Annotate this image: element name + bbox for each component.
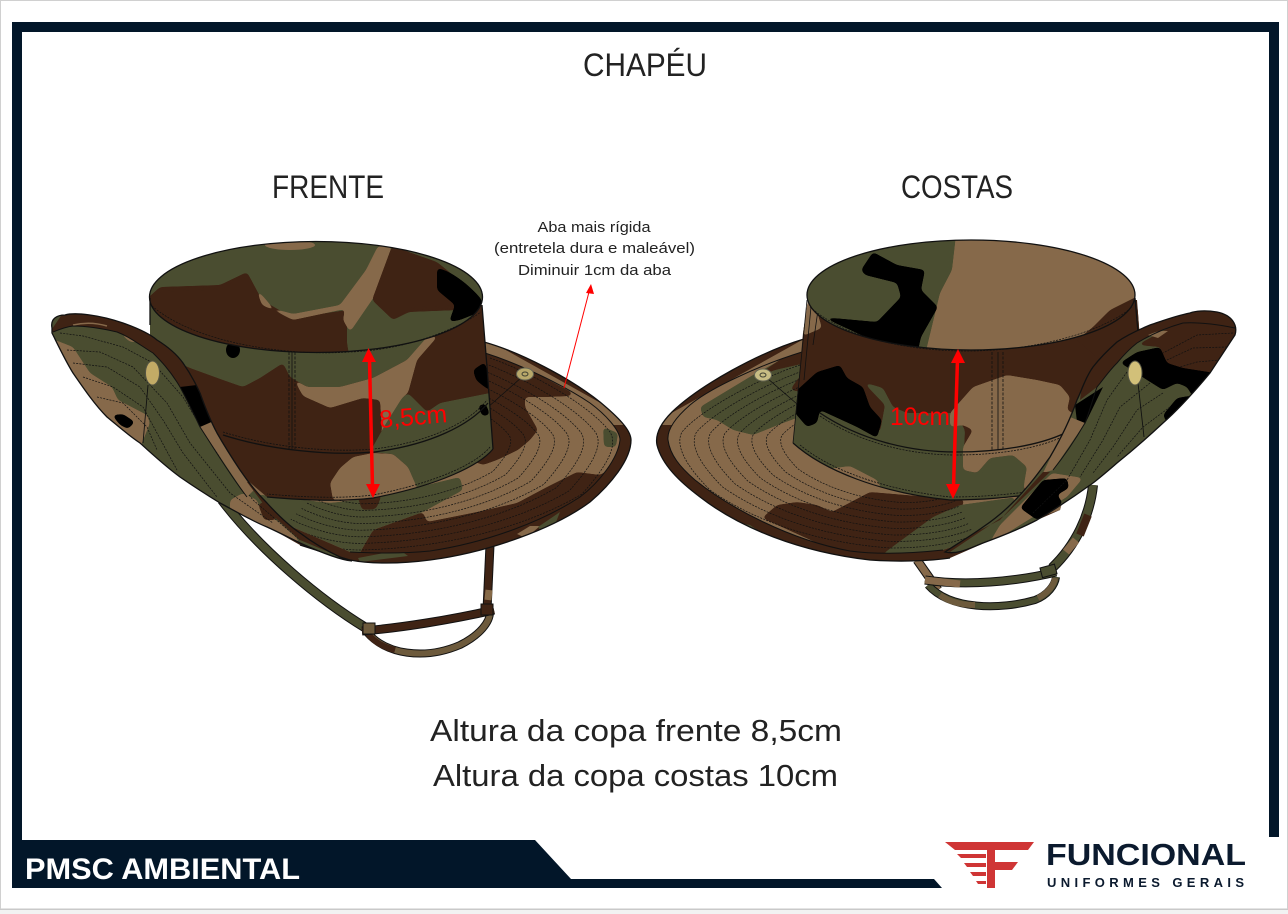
annotation arrow pointing to the brim note	[564, 284, 594, 388]
footer label: PMSC AMBIENTAL	[25, 853, 300, 886]
heading: back: COSTAS	[901, 169, 1013, 205]
logo tagline: UNIFORMES GERAIS	[1047, 875, 1244, 890]
snap button: back view	[1128, 361, 1142, 385]
hat: back view	[650, 235, 1240, 606]
heading: front: FRENTE	[272, 169, 384, 205]
crown stitching: back view	[793, 300, 1065, 500]
measurement arrow: front 8,5cm	[362, 348, 448, 498]
brim annotation text	[494, 219, 695, 279]
crown top: front view	[140, 240, 482, 360]
crown wall: back view	[788, 298, 1145, 505]
eyelet: front view	[487, 368, 534, 408]
crown wall: front view	[150, 305, 494, 501]
side flap: back view	[940, 305, 1240, 553]
snap button: front view	[146, 361, 160, 385]
brim annotation text: Aba mais rígida	[538, 219, 651, 236]
side flap: front view	[50, 310, 355, 563]
measurement arrow: back 10cm	[890, 349, 965, 499]
crown stitching: front view	[223, 352, 493, 500]
brim annotation text: (entretela dura e maleável)	[494, 240, 695, 257]
chin strap: back view	[917, 485, 1093, 606]
brim annotation text: Diminuir 1cm da aba	[518, 262, 672, 279]
logo wordmark: FUNCIONAL	[1046, 837, 1246, 872]
chin strap: front view	[222, 500, 494, 653]
crown height summary text: Altura da copa frente 8,5cm	[430, 713, 842, 748]
measurement arrow: front 8,5cm: 8,5cm	[378, 400, 448, 434]
eyelet: back view	[754, 369, 797, 404]
logo: Funcional Uniformes Gerais	[945, 837, 1246, 890]
title: CHAPÉU	[583, 47, 707, 83]
logo mark	[945, 842, 1034, 888]
brim: front view	[249, 342, 632, 564]
crown height summary text	[430, 713, 842, 793]
hat: front view	[50, 240, 640, 653]
measurement arrow: back 10cm: 10cm	[890, 403, 950, 431]
footer banner	[12, 840, 942, 888]
crown top: back view	[800, 235, 1140, 355]
crown height summary text: Altura da copa costas 10cm	[433, 758, 838, 793]
brim: back view	[656, 338, 1062, 562]
